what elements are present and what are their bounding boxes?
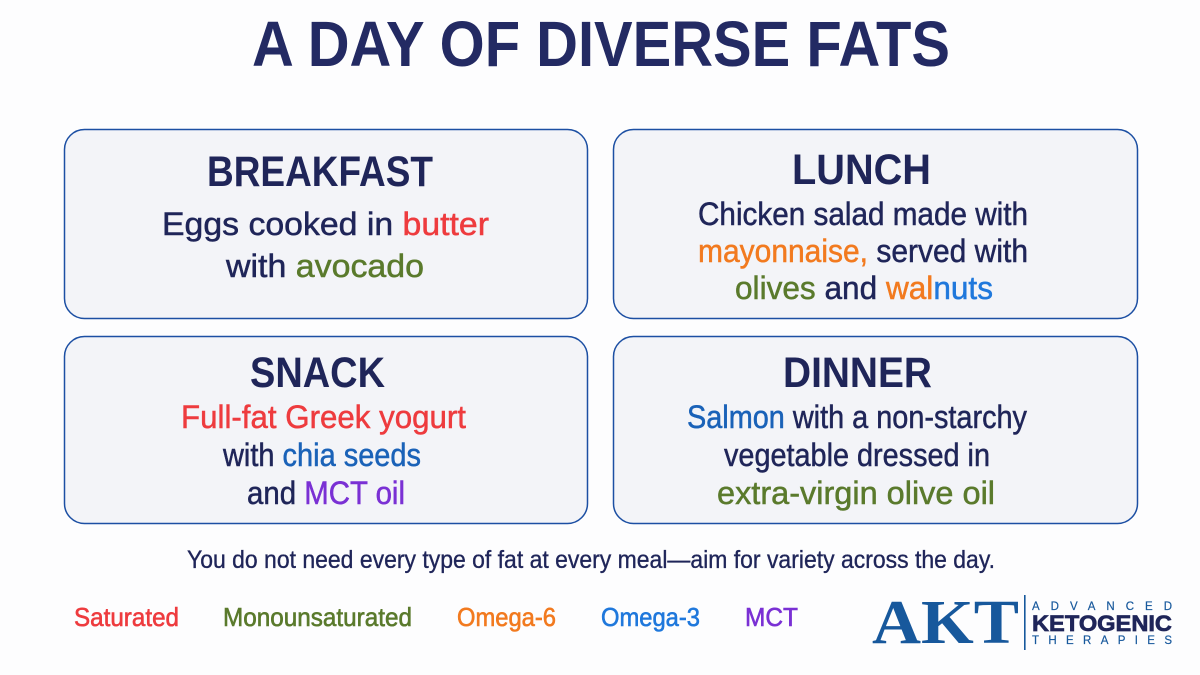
heading: dinner: DINNER	[783, 350, 932, 397]
heading: lunch: LUNCH	[792, 147, 931, 194]
text: breakfast description: with avocado	[225, 248, 424, 284]
legend item: MCT: MCT	[745, 602, 798, 632]
legend item: monounsaturated: Monounsaturated	[223, 602, 412, 632]
text: lunch description: mayonnaise, served with	[698, 233, 1028, 269]
heading: breakfast: BREAKFAST	[207, 149, 433, 196]
text: breakfast description: Eggs cooked in butter	[162, 206, 489, 242]
text: lunch description	[698, 196, 1028, 306]
logo: AKT Advanced Ketogenic Therapies	[872, 589, 1172, 657]
text: dinner description: vegetable dressed in	[724, 437, 990, 473]
legend item: omega-3: Omega-3	[601, 602, 700, 632]
text: snack description: Full-fat Greek yogurt	[181, 399, 466, 435]
logo: AKT Advanced Ketogenic Therapies: KETOGENIC	[1032, 611, 1172, 636]
text: snack description	[181, 399, 466, 511]
panel: dinner	[614, 336, 1138, 524]
title: A DAY OF DIVERSE FATS	[252, 8, 950, 80]
text: snack description: with chia seeds	[222, 437, 421, 473]
text: lunch description: olives and walnuts	[735, 270, 993, 306]
panel: lunch	[614, 130, 1138, 318]
logo: AKT Advanced Ketogenic Therapies: AKT	[872, 589, 1019, 657]
legend item: saturated: Saturated	[74, 602, 179, 632]
footer note: You do not need every type of fat at every meal—aim for variety across the day.	[187, 546, 995, 574]
text: dinner description	[687, 399, 1028, 511]
logo: AKT Advanced Ketogenic Therapies: ADVANCED	[1032, 601, 1172, 613]
legend	[74, 602, 798, 632]
heading: snack: SNACK	[250, 350, 385, 397]
panel: snack	[64, 336, 588, 524]
text: breakfast description	[162, 206, 489, 284]
logo: AKT Advanced Ketogenic Therapies: THERAPIES	[1032, 635, 1172, 647]
panel: breakfast	[64, 130, 588, 318]
text: dinner description: extra-virgin olive oil	[717, 475, 995, 511]
text: snack description: and MCT oil	[247, 475, 405, 511]
text: dinner description: Salmon with a non-starchy	[687, 399, 1028, 435]
legend item: omega-6: Omega-6	[457, 602, 556, 632]
text: lunch description: Chicken salad made with	[698, 196, 1028, 232]
